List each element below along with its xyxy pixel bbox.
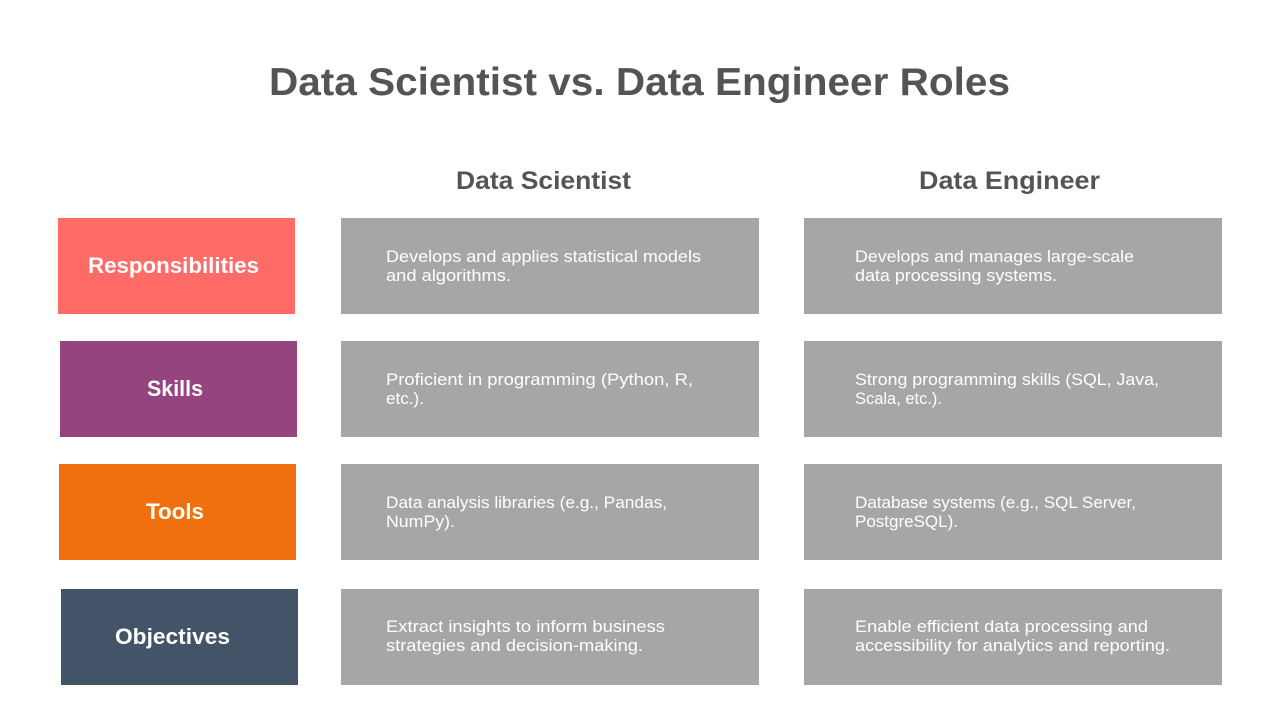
panel: Data Engineer responsibilities [804, 218, 1222, 314]
panel: Data Engineer skills: Scala, etc.). [855, 389, 942, 408]
panel: Data Scientist tools [341, 464, 759, 560]
panel: Data Engineer objectives: accessibility for analytics and reporting. [855, 636, 1170, 655]
panel: Data Scientist responsibilities [341, 218, 759, 314]
row label: Tools: Tools [146, 499, 204, 524]
panel: Data Engineer tools [804, 464, 1222, 560]
column heading: Data Scientist: Data Scientist [456, 167, 632, 195]
panel: Data Engineer skills: Strong programming skills (SQL, Java, [855, 370, 1159, 389]
row label: Objectives [61, 589, 298, 685]
panel: Data Engineer tools: Database systems (e.g., SQL Server, [855, 493, 1136, 512]
panel: Data Scientist objectives: strategies and decision-making. [386, 636, 643, 655]
panel: Data Scientist objectives: Extract insights to inform business [386, 617, 665, 636]
panel: Data Engineer objectives [804, 589, 1222, 685]
panel: Data Engineer skills [804, 341, 1222, 437]
row label: Tools [59, 464, 296, 560]
title: Data Scientist vs. Data Engineer Roles [269, 61, 1010, 104]
panel: Data Scientist objectives [341, 589, 759, 685]
panel: Data Engineer responsibilities: data processing systems. [855, 266, 1057, 285]
row label: Skills [60, 341, 297, 437]
panel: Data Scientist tools: Data analysis libraries (e.g., Pandas, [386, 493, 667, 512]
panel: Data Scientist skills: Proficient in programming (Python, R, [386, 370, 693, 389]
row label: Responsibilities: Responsibilities [88, 253, 259, 278]
row label: Responsibilities [58, 218, 295, 314]
panel: Data Engineer responsibilities: Develops and manages large-scale [855, 247, 1134, 266]
panel: Data Scientist tools: NumPy). [386, 512, 455, 531]
panel: Data Engineer objectives: Enable efficient data processing and [855, 617, 1148, 636]
row label: Skills: Skills [147, 376, 203, 401]
panel: Data Scientist responsibilities: Develops and applies statistical models [386, 247, 701, 266]
row label: Objectives: Objectives [115, 624, 230, 649]
panel: Data Engineer tools: PostgreSQL). [855, 512, 958, 531]
panel: Data Scientist responsibilities: and algorithms. [386, 266, 511, 285]
panel: Data Scientist skills: etc.). [386, 389, 424, 408]
panel: Data Scientist skills [341, 341, 759, 437]
column heading: Data Engineer: Data Engineer [919, 167, 1100, 195]
